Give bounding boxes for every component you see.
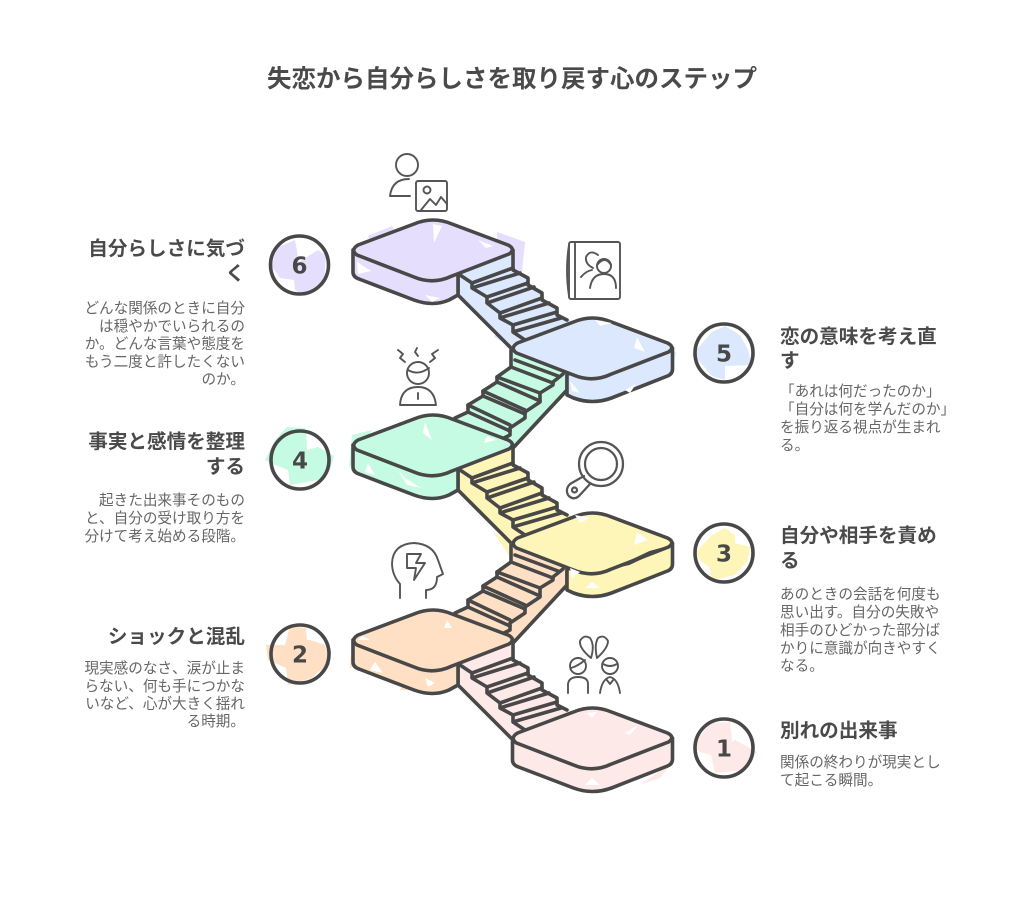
number badge 5: 5 bbox=[716, 342, 732, 368]
body 2: 現実感のなさ、涙が止ま bbox=[84, 661, 245, 677]
heading 6: く bbox=[225, 263, 245, 285]
sketch fill overflow: pink bbox=[640, 760, 675, 785]
body 4: と、自分の受け取り方を bbox=[85, 510, 245, 527]
icon: person with picture bbox=[390, 154, 447, 211]
body 5: を振り返る視点が生まれ bbox=[780, 419, 941, 436]
icon: head with lightning bolt bbox=[392, 543, 443, 598]
body 6: もう二度と許したくない bbox=[85, 354, 245, 370]
icon: book with two people bbox=[567, 242, 620, 299]
body 2: る時期。 bbox=[187, 713, 245, 730]
step 1 label bbox=[693, 719, 941, 789]
sketch fill overflow: purple bbox=[368, 226, 525, 282]
step 5 label bbox=[692, 324, 955, 454]
heading 4: する bbox=[206, 456, 245, 478]
sketch fill overflow: blue bbox=[494, 322, 676, 374]
sketch fill overflow: mint bbox=[349, 372, 558, 468]
stair: 4 to 3 bbox=[458, 445, 575, 545]
body 5: 「自分は何を学んだのか」 bbox=[780, 401, 955, 418]
stair: 3 to 2 bbox=[440, 543, 567, 643]
number badge 5 bbox=[692, 324, 753, 382]
body 5: る。 bbox=[780, 438, 809, 454]
platform 6 bbox=[353, 220, 512, 304]
body 6: どんな関係のときに自分 bbox=[84, 301, 245, 317]
heading 4: 事実と感情を整理 bbox=[88, 431, 245, 453]
body 4: 分けて考え始める段階。 bbox=[84, 528, 245, 545]
body 1: 関係の終わりが現実とし bbox=[780, 755, 941, 771]
platform 1 bbox=[512, 708, 672, 792]
body 2: らない、何も手につかな bbox=[84, 678, 245, 695]
step 2 label bbox=[84, 625, 330, 730]
icon: two people with broken heart bbox=[568, 637, 620, 693]
icon: stressed person bbox=[398, 348, 438, 405]
heading 1: 別れの出来事 bbox=[780, 720, 898, 742]
number badge 4 bbox=[265, 427, 334, 489]
body 6: か。どんな言葉や態度を bbox=[85, 336, 245, 352]
body 5: 「あれは何だったのか」 bbox=[780, 384, 941, 400]
number badge 2: 2 bbox=[292, 642, 308, 668]
number badge 1: 1 bbox=[716, 736, 732, 762]
body 6: は穏やかでいられるの bbox=[99, 318, 245, 335]
body 2: いなど、心が大きく揺れ bbox=[85, 696, 245, 712]
platform 2 bbox=[353, 610, 512, 694]
staircase bbox=[349, 220, 676, 792]
body 6: のか。 bbox=[202, 371, 245, 388]
platform 3 bbox=[513, 513, 672, 596]
number badge 6: 6 bbox=[291, 254, 308, 280]
stair: 2 to 1 bbox=[458, 640, 575, 740]
body 3: なる。 bbox=[780, 658, 824, 674]
number badge 3: 3 bbox=[716, 542, 732, 568]
platform 5 bbox=[513, 318, 672, 402]
number badge 4: 4 bbox=[292, 448, 308, 474]
icon: magnifying glass bbox=[567, 442, 623, 498]
sketch fill overflow: yellow bbox=[493, 532, 674, 570]
number badge 1 bbox=[693, 719, 757, 777]
title: 失恋から自分らしさを取り戻す心のステップ bbox=[267, 65, 757, 93]
body 3: 思い出す。自分の失敗や bbox=[780, 604, 939, 621]
number badge 3 bbox=[695, 524, 753, 582]
number badge 2 bbox=[266, 625, 330, 685]
body 1: て起こる瞬間。 bbox=[780, 772, 882, 789]
heading 3: 自分や相手を責め bbox=[780, 525, 937, 547]
platform 4 bbox=[353, 415, 512, 498]
heading 5: す bbox=[780, 350, 800, 372]
body 3: 相手のひどかった部分ば bbox=[780, 622, 941, 639]
step 3 label bbox=[695, 524, 941, 674]
sketch fill overflow: orange bbox=[350, 640, 420, 690]
number badge 6 bbox=[270, 236, 328, 296]
heading 3: る bbox=[780, 550, 800, 572]
step 6 label bbox=[84, 236, 328, 388]
body 3: あのときの会話を何度も bbox=[780, 587, 941, 603]
heading 6: 自分らしさに気づ bbox=[88, 238, 245, 260]
heading 5: 恋の意味を考え直 bbox=[780, 326, 937, 348]
stair: 5 to 4 bbox=[440, 348, 567, 448]
body 3: かりに意識が向きやすく bbox=[780, 640, 941, 657]
body 4: 起きた出来事そのもの bbox=[99, 493, 245, 509]
heading 2: ショックと混乱 bbox=[108, 626, 245, 648]
step 4 label bbox=[84, 427, 334, 545]
stair: 6 to 5 bbox=[458, 250, 575, 350]
